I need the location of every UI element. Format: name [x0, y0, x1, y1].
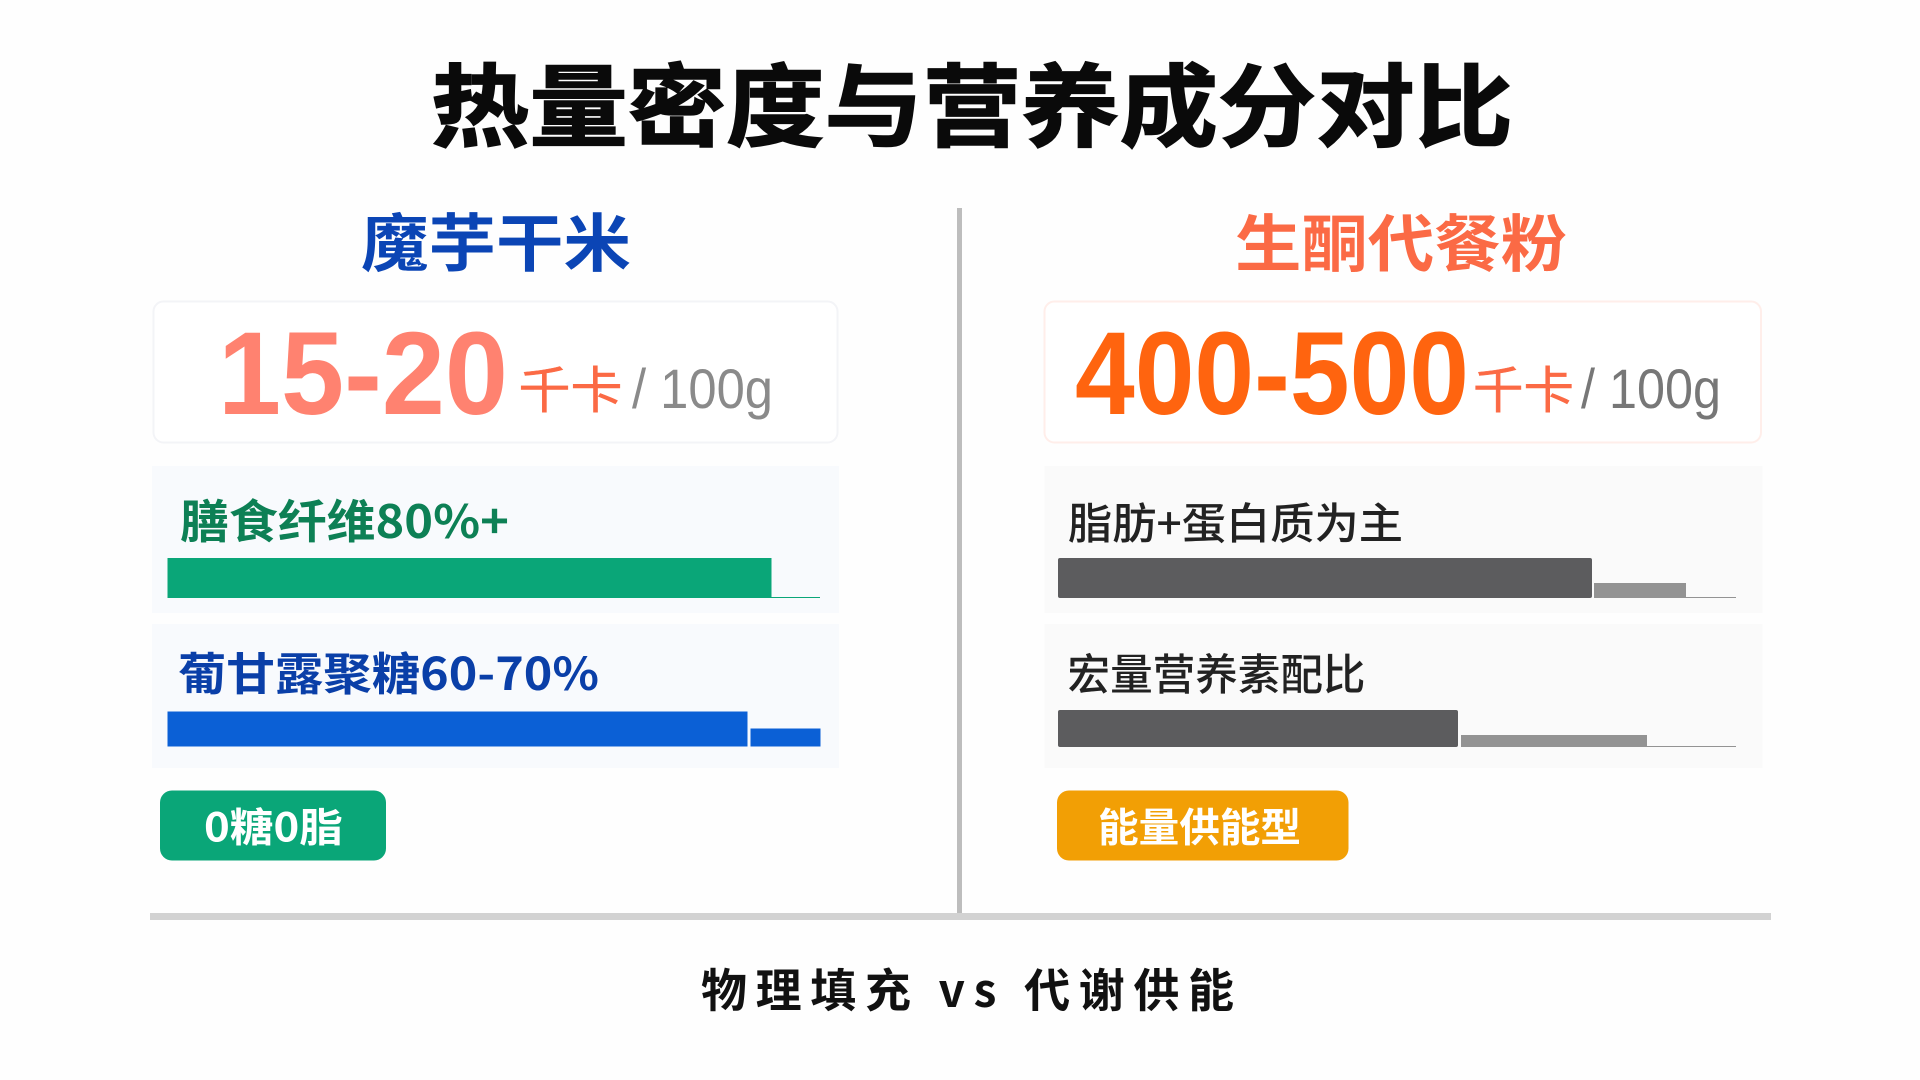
glucomannan bar: [168, 712, 820, 746]
panel: konjac dry rice: [152, 194, 839, 860]
calorie unit: 千卡: [518, 351, 622, 423]
calorie value: 400-500: [1075, 308, 1469, 440]
macronutrient bar: [1058, 710, 1736, 747]
metric: fat and protein: [1044, 466, 1762, 613]
per 100g: / 100g: [632, 357, 773, 420]
title: 热量密度与营养成分对比: [431, 35, 1513, 165]
metric: glucomannan: [152, 624, 839, 768]
heading: keto: 生酮代餐粉: [1235, 194, 1567, 284]
metric label: 宏量营养素配比: [1068, 641, 1366, 703]
fat and protein bar: [1058, 558, 1736, 598]
tag: zero sugar zero fat: [160, 790, 386, 860]
calorie card: keto: [1044, 302, 1761, 442]
footer caption: 物理填充 vs 代谢供能: [701, 955, 1234, 1021]
vertical divider: [957, 208, 962, 916]
horizontal divider: [150, 913, 1771, 920]
tag: energy supply type: 能量供能型: [1098, 796, 1301, 854]
metric: dietary fibre: [152, 466, 839, 613]
metric label: 脂肪+蛋白质为主: [1068, 490, 1403, 552]
metric label: 葡甘露聚糖60-70%: [178, 638, 599, 703]
metric label: 膳食纤维80%+: [180, 486, 509, 552]
per 100g: / 100g: [1581, 357, 1721, 420]
fibre bar: [168, 558, 820, 598]
calorie value: 15-20: [218, 308, 508, 440]
calorie card: konjac: [154, 302, 838, 442]
metric: macronutrient ratio: [1044, 624, 1762, 768]
panel: keto meal powder: [1044, 194, 1762, 860]
calorie unit: 千卡: [1473, 351, 1574, 423]
heading: konjac: 魔芋干米: [361, 194, 631, 285]
tag: energy supply type: [1057, 790, 1348, 860]
tag: zero sugar zero fat: 0糖0脂: [204, 796, 343, 854]
